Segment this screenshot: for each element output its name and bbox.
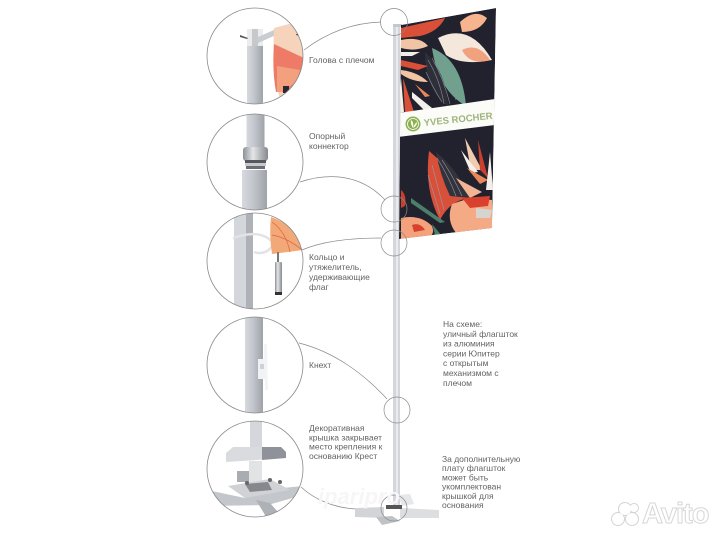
detail circle: support connector: [207, 112, 303, 212]
note: scheme description: серии Юпитер: [443, 348, 500, 358]
label: decorative cover: крышка закрывает: [309, 432, 382, 442]
flag: [398, 8, 496, 240]
detail circle: head with arm: [207, 8, 304, 106]
label: decorative cover: Декоративная: [309, 423, 365, 433]
note: scheme description: с открытым: [443, 358, 489, 368]
label: support connector: Опорный: [309, 131, 345, 141]
note: extra payment option: может быть: [442, 472, 489, 482]
label: head with arm: Голова с плечом: [309, 55, 375, 65]
label: ring and weight: удерживающие: [309, 272, 370, 282]
note: extra payment option: крышкой для: [442, 491, 494, 501]
label: support connector: коннектор: [309, 141, 349, 151]
flagpole: [393, 24, 402, 508]
note: scheme description: механизмом с: [443, 368, 499, 378]
note: extra payment option: плату флагшток: [442, 463, 506, 473]
label: decorative cover: место крепления к: [309, 442, 383, 452]
note: scheme description: плечом: [443, 378, 472, 388]
logo: YVES ROCHER: [423, 111, 493, 129]
label: ring and weight: флаг: [309, 282, 329, 292]
detail circle: cleat: [207, 315, 303, 415]
detail circle: decorative cover on cross base: [207, 421, 303, 520]
watermark: Avito logo: [612, 498, 709, 530]
connector lines: [299, 22, 387, 509]
watermark: Avito logo: Avito: [642, 498, 709, 530]
detail circle: ring and weight: [207, 211, 303, 311]
label: ring and weight: утяжелитель,: [309, 262, 362, 272]
small circle markers: [380, 8, 410, 521]
label: ring and weight: Кольцо и: [309, 252, 345, 262]
label: cleat: Кнехт: [309, 360, 331, 370]
logo: [406, 111, 493, 132]
note: extra payment option: укомплектован: [442, 482, 501, 492]
label: decorative cover: основанию Крест: [309, 451, 377, 461]
note: extra payment option: основания: [442, 500, 484, 510]
cross base: [355, 494, 439, 525]
note: extra payment option: За дополнительную: [442, 454, 521, 464]
note: scheme description: На схеме:: [443, 319, 482, 329]
note: scheme description: из алюминия: [443, 339, 495, 349]
note: scheme description: уличный флагшток: [443, 329, 518, 339]
watermark: ipari: ipariprо: [318, 484, 400, 509]
